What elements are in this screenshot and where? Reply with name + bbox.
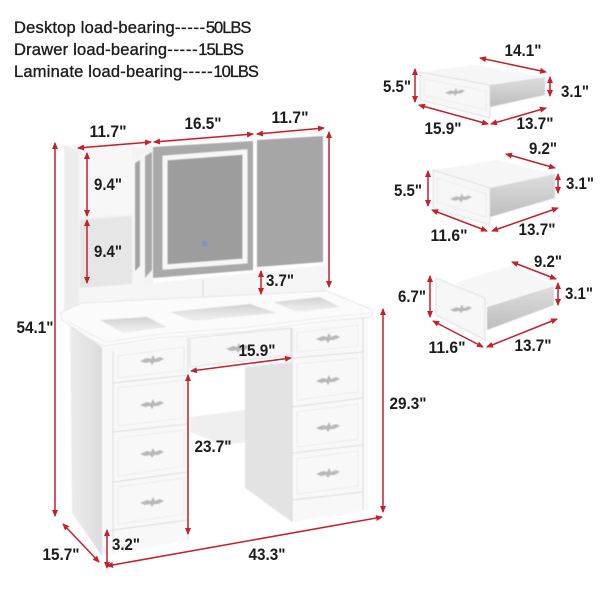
dimension arrows: vanity: [55, 128, 383, 568]
dimension labels: drawers: 11.6": [430, 227, 468, 245]
dimension labels: vanity: 54.1": [16, 319, 54, 337]
dimension labels: drawers: 11.6": [428, 339, 466, 357]
glass trays: [100, 317, 167, 333]
right mirror: [257, 136, 323, 267]
dimension labels: vanity: 15.9": [238, 342, 276, 360]
dimension labels: drawers: 14.1": [504, 42, 542, 60]
back panel: [190, 410, 255, 445]
load-bearing specifications: Desktop load-bearing-----50LBS: [14, 19, 251, 37]
dimension labels: drawers: 13.7": [518, 221, 556, 239]
desk body: [60, 291, 373, 556]
dimension labels: drawers: 3.1": [561, 83, 589, 101]
drawer 2 illustration: [433, 160, 555, 225]
dimension labels: drawers: 5.5": [394, 182, 422, 200]
dimension labels: drawers: 9.2": [534, 253, 562, 271]
vanity hutch: [64, 130, 327, 316]
dimension labels: drawers: 3.1": [565, 285, 593, 303]
dimension labels: drawers: 3.1": [566, 175, 594, 193]
drawer 1 illustration: [420, 65, 545, 118]
dimension labels: drawers: 6.7": [398, 288, 426, 306]
desktop top: [60, 291, 373, 346]
dimension labels: vanity: 16.5": [184, 115, 222, 133]
side panel: [70, 325, 102, 556]
dimension labels: vanity: 11.7": [272, 109, 308, 127]
inner leg panel: [245, 362, 292, 522]
drawer handles: [140, 333, 340, 507]
dimension labels: drawers: [383, 42, 594, 357]
center drawer: [190, 328, 291, 367]
dimension labels: vanity: 9.4": [94, 243, 122, 261]
center mirror: [153, 141, 253, 278]
dimension labels: vanity: 3.7": [266, 272, 294, 290]
dimension labels: vanity: 9.4": [94, 176, 122, 194]
load-bearing specifications: Drawer load-bearing-----15LBS: [14, 41, 244, 59]
load-bearing specifications: Laminate load-bearing-----10LBS: [14, 63, 259, 81]
dimension labels: vanity: 23.7": [194, 438, 232, 456]
left pedestal: [102, 336, 190, 556]
dimension labels: vanity: 11.7": [90, 123, 126, 141]
load-bearing specifications: [14, 19, 259, 81]
dimension arrows: drawers: [415, 58, 558, 347]
dimension labels: drawers: 13.7": [514, 337, 552, 355]
dimension labels: vanity: 29.3": [390, 395, 426, 413]
dimension labels: drawers: 9.2": [529, 140, 557, 158]
dimension labels: vanity: [16, 109, 426, 564]
open left mirror door: [132, 148, 152, 296]
drawer 3 illustration: [436, 265, 555, 340]
dimension labels: vanity: 43.3": [248, 546, 286, 564]
dimension labels: drawers: 15.9": [424, 120, 462, 138]
dimension labels: vanity: 3.2": [112, 536, 140, 554]
right pedestal: [292, 316, 368, 522]
dimension labels: drawers: 5.5": [383, 78, 411, 96]
dimension labels: drawers: 13.7": [516, 115, 554, 133]
dimension labels: vanity: 15.7": [42, 546, 80, 564]
